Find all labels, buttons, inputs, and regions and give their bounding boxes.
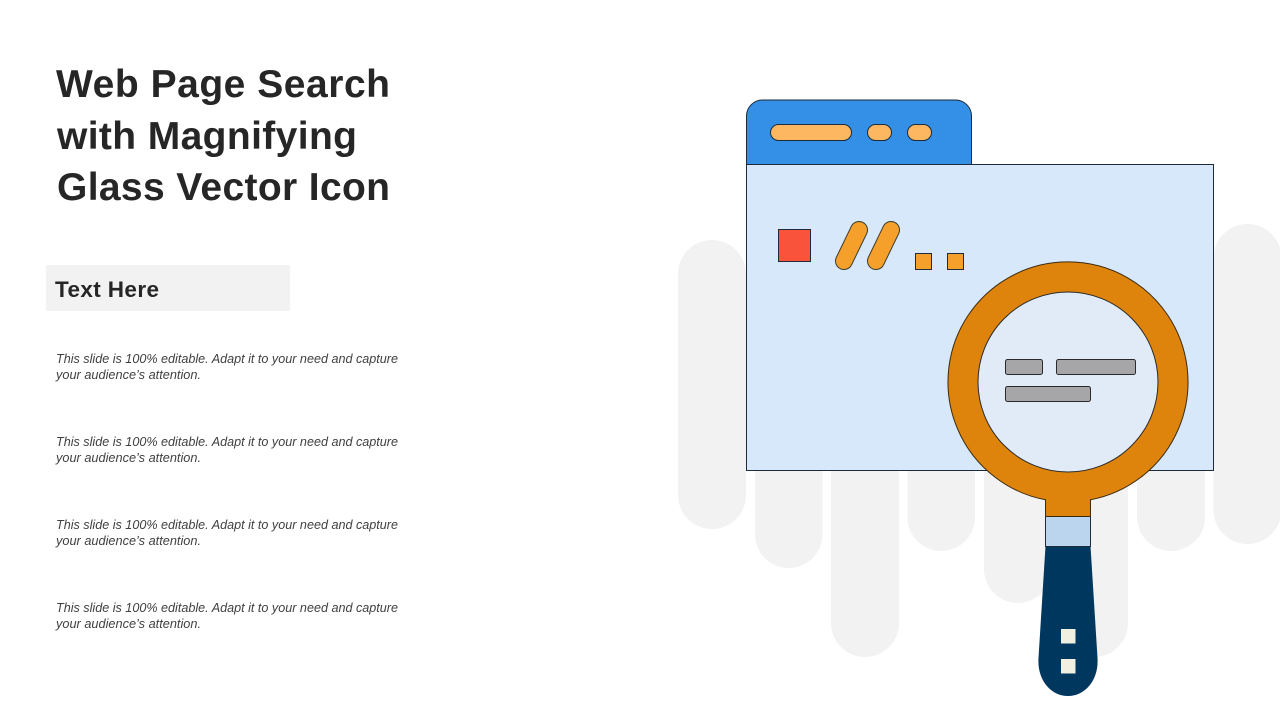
search result bars [1006,360,1136,402]
handle squares [1061,629,1076,674]
subheading: Text Here: Text Here [55,277,159,302]
title: Web Page Search [56,63,390,106]
background pills [678,224,1280,657]
lens glass [978,292,1158,472]
title [56,63,390,209]
text block 4: This slide is 100% editable. Adapt it to your need and capture [56,600,398,615]
handle [1038,546,1098,696]
title: Glass Vector Icon [57,166,390,209]
text block 1 [55,351,398,382]
browser page [746,164,1214,470]
text block 4: your audience’s attention. [55,616,201,631]
handle collar [1046,516,1090,546]
text block 2 [55,434,398,465]
text block 2: your audience’s attention. [55,450,201,465]
title: with Magnifying [56,115,357,158]
lens ring [948,262,1188,516]
text block 4 [55,600,398,631]
icon: browser window [746,100,1214,470]
text block 2: This slide is 100% editable. Adapt it to your need and capture [56,434,398,449]
subheading: Text Here [46,265,290,311]
text block 3: This slide is 100% editable. Adapt it to your need and capture [56,517,398,532]
text block 3 [55,517,398,548]
text block 1: This slide is 100% editable. Adapt it to your need and capture [56,351,398,366]
text block 1: your audience’s attention. [55,367,201,382]
text block 3: your audience’s attention. [55,533,201,548]
icon: magnifying glass [948,262,1188,696]
browser tab [746,100,972,164]
